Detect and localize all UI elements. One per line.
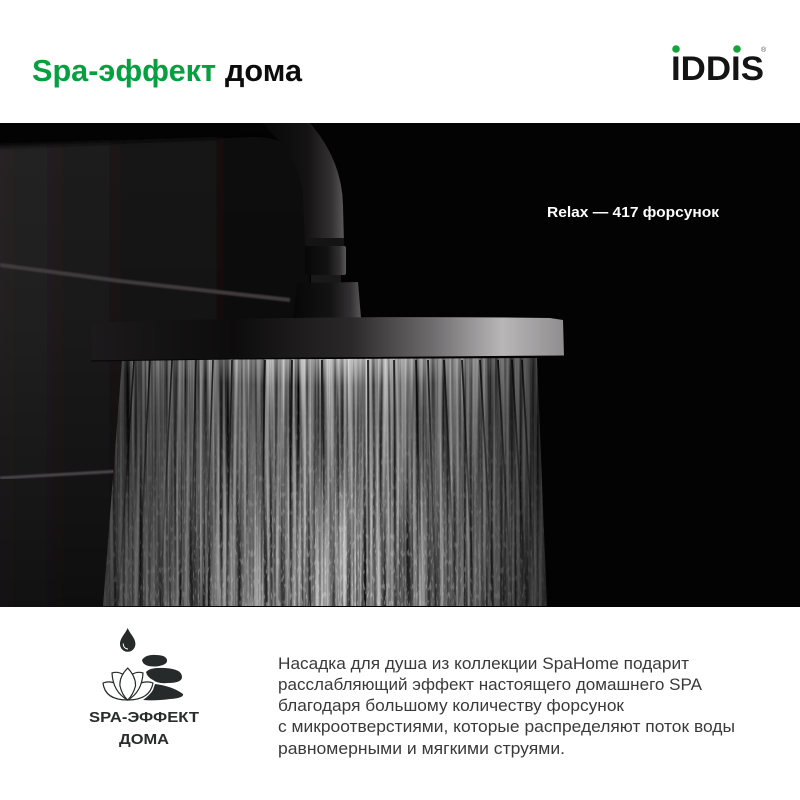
logo: IDDIS: ®	[761, 46, 767, 54]
description text: Насадка для душа из коллекции SpaHome подарит	[278, 655, 689, 673]
shower arm	[276, 123, 361, 318]
icon caption: ДОМА	[119, 731, 169, 748]
label: Relax: Relax — 417 форсунок	[547, 204, 719, 221]
icon: water drop	[120, 628, 135, 652]
shower head	[91, 317, 564, 361]
icon: lotus	[103, 668, 153, 700]
title: Spa-эффект	[32, 53, 216, 88]
logo: IDDIS: IDDIS	[671, 50, 764, 88]
title: дома	[225, 53, 303, 88]
description text	[278, 655, 735, 758]
tiled wall	[0, 137, 312, 620]
icon caption: SPA-ЭФФЕКТ	[89, 709, 199, 726]
description text: равномерными и мягкими струями.	[278, 740, 565, 758]
icon: spa effect	[89, 628, 199, 748]
water streams	[90, 350, 560, 610]
dark gaps between jets	[118, 360, 536, 606]
photo: shower head with water	[0, 123, 800, 620]
description text: с микроотверстиями, которые распределяют поток воды	[278, 718, 735, 736]
icon caption	[89, 709, 199, 748]
title	[32, 53, 303, 88]
description text: благодаря большому количеству форсунок	[278, 697, 625, 715]
icon: stones	[142, 655, 183, 700]
description text: расслабляющий эффект настоящего домашнего SPA	[278, 676, 702, 694]
